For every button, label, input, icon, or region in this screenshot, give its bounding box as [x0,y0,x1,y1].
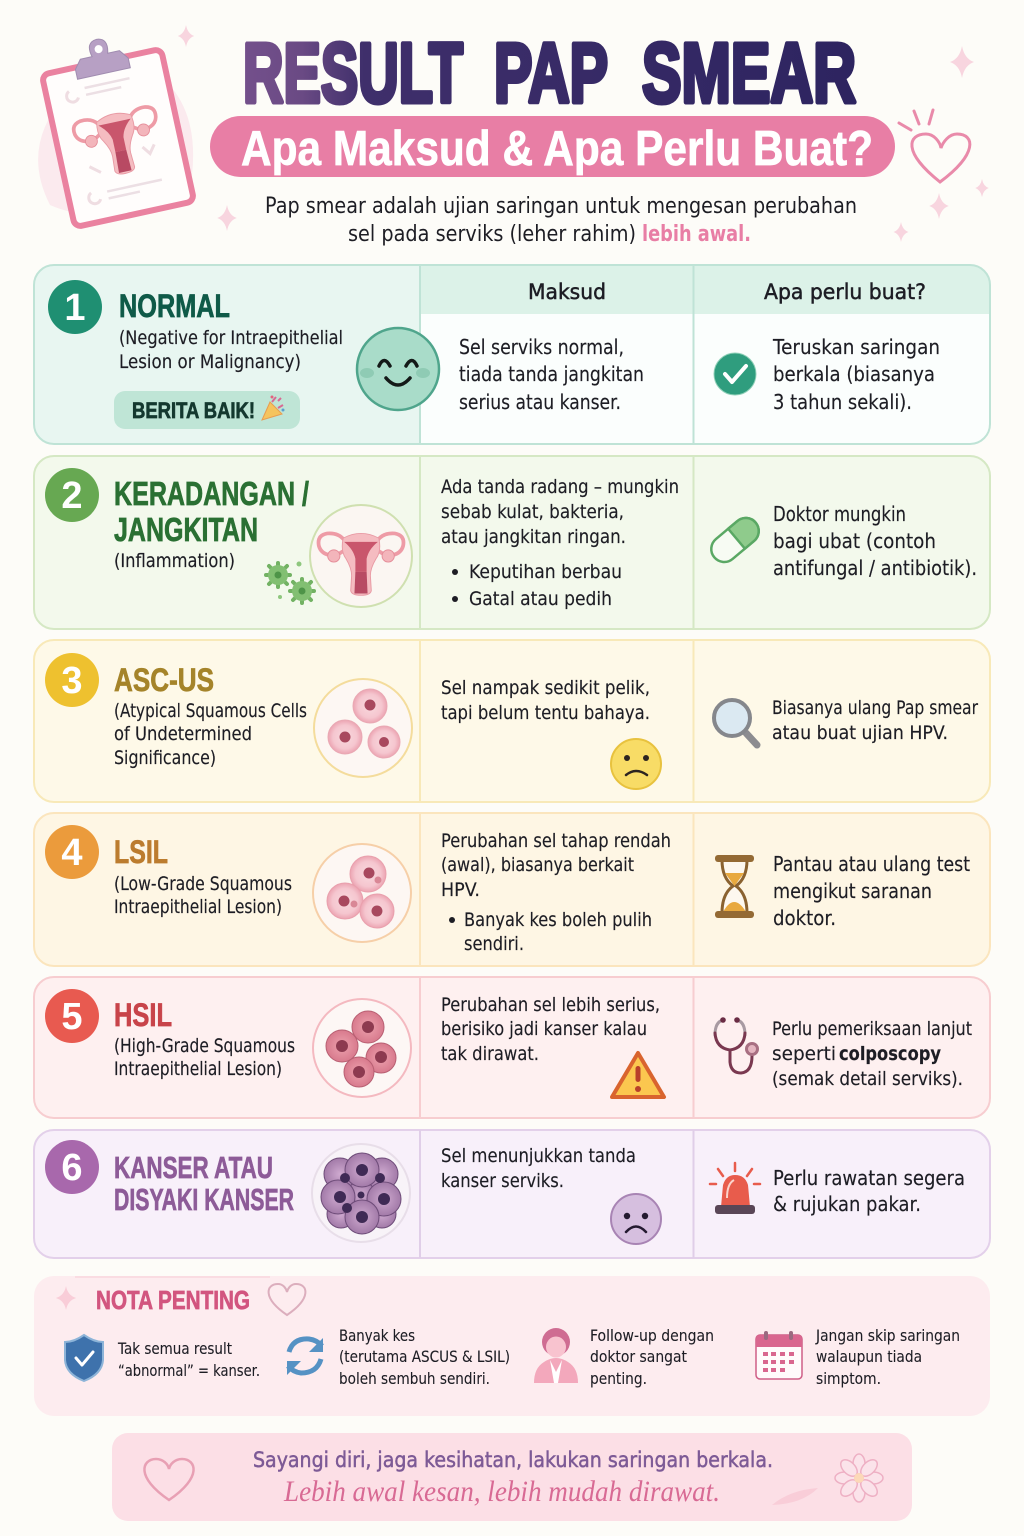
text: action hsil [772,1018,972,1090]
number badge 6 [45,1140,99,1194]
text: action lsil: mengikut saranan [773,879,932,903]
description: hsil [114,1035,295,1080]
note text 1 [117,1339,260,1380]
heading: asc-us: ASC-US [114,662,214,698]
heading: keradangan [114,475,309,548]
panel: 6 kanser [34,1130,990,1258]
heading: keradangan: KERADANGAN / [114,475,309,512]
icon: calendar [756,1331,802,1379]
text: maksud hsil: berisiko jadi kanser kalau [441,1018,647,1040]
column header: apa perlu buat: Apa perlu buat? [764,280,926,304]
text: maksud asc-us: Sel nampak sedikit pelik, [441,677,650,699]
description: asc-us [114,700,307,769]
text: maksud lsil: sendiri. [464,933,524,955]
heading: lsil: LSIL [114,834,168,870]
note text 3: Follow-up dengan [590,1326,714,1345]
icon: flower [835,1454,883,1502]
heading: kanser: KANSER ATAU [114,1150,273,1185]
text: maksud keradangan [441,476,679,610]
icon: leaf [772,1488,818,1505]
description: normal [119,327,343,373]
note text 1: Tak semua result [117,1339,232,1358]
intro text [265,194,857,247]
text: action normal: Teruskan saringan [772,335,940,359]
description: asc-us: Significance) [114,747,216,769]
note text 4: Jangan skip saringan [815,1326,960,1345]
text: action normal: 3 tahun sekali). [773,390,912,414]
number badge 5 [45,989,99,1043]
text: action hsil: Perlu pemeriksaan lanjut [772,1018,972,1040]
footer line 2: Lebih awal kesan, lebih mudah dirawat. [283,1475,720,1508]
icon: refresh arrows [287,1338,323,1375]
icon: capsule [706,513,764,567]
text: maksud lsil [441,830,671,955]
icon: cells asc-us [314,679,412,777]
icon: heart outline [269,1284,305,1315]
text: maksud keradangan: sebab kulat, bakteria, [441,501,624,523]
panel: 3 asc-us [34,640,990,802]
note text 3: penting. [590,1369,647,1388]
note text 3 [590,1326,714,1388]
intro text: sel pada serviks (leher rahim) [348,222,636,247]
panel: 1 normal [34,265,990,444]
text: maksud keradangan: Gatal atau pedih [469,588,612,610]
panel: nota penting [34,1276,990,1416]
description: asc-us: of Undetermined [114,723,252,745]
text: action hsil: (semak detail serviks). [772,1068,963,1090]
heading: kanser [114,1150,294,1217]
note text 2: (terutama ASCUS & LSIL) [339,1347,510,1366]
icon: clipboard with uterus [37,26,194,227]
footer line 1: Sayangi diri, jaga kesihatan, lakukan saringan berkala. [253,1448,773,1472]
text: maksud asc-us: tapi belum tentu bahaya. [441,702,650,724]
title: PAP [494,26,608,120]
text: maksud hsil: Perubahan sel lebih serius, [441,994,660,1016]
intro text: Pap smear adalah ujian saringan untuk mengesan perubahan [265,194,857,219]
badge: berita baik: BERITA BAIK! [132,398,255,423]
icon: worried face [611,739,661,789]
description: normal: Lesion or Malignancy) [119,351,301,373]
note text 4: walaupun tiada [816,1347,922,1366]
icon: footer heart [144,1459,194,1500]
note text 2: boleh sembuh sendiri. [339,1369,490,1388]
text: maksud hsil: tak dirawat. [441,1043,539,1065]
text: maksud normal [459,335,644,414]
number badge 1 [48,280,102,334]
text: action asc-us: atau buat ujian HPV. [772,722,948,744]
text: maksud lsil: Perubahan sel tahap rendah [441,830,671,852]
description: asc-us: (Atypical Squamous Cells [114,700,307,722]
description: hsil: Intraepithelial Lesion) [114,1058,282,1080]
icon: cells hsil [313,999,411,1097]
number badge 2: 2 [61,475,83,517]
text: maksud lsil: HPV. [441,879,480,901]
icon: sparkle [56,1286,76,1310]
intro text: lebih awal. [642,222,751,247]
icon: cell cluster [312,1144,410,1242]
icon: happy face [357,328,439,410]
text: action hsil: colposcopy [839,1043,942,1065]
text: maksud keradangan: atau jangkitan ringan. [441,526,626,548]
number badge 1: 1 [64,287,86,329]
icon: sad face [611,1194,661,1244]
panel: footer message [112,1433,912,1521]
title: SMEAR [642,26,856,120]
number badge 3 [45,653,99,707]
text: maksud hsil [441,994,660,1065]
text: action lsil: Pantau atau ulang test [773,852,970,876]
text: action keradangan: antifungal / antibiotik). [773,556,977,580]
decorative sparkles [178,25,989,242]
text: maksud keradangan: Ada tanda radang – mungkin [441,476,679,498]
description: lsil: (Low-Grade Squamous [114,873,292,895]
heading: nota penting: NOTA PENTING [96,1285,250,1315]
number badge 5: 5 [61,996,83,1038]
column header: maksud: Maksud [528,280,606,304]
note text 2: Banyak kes [339,1326,415,1345]
title: RESULT [243,26,463,120]
text: action normal [772,335,940,414]
note text 4 [815,1326,960,1388]
number badge 2 [45,468,99,522]
panel: 5 hsil [34,977,990,1118]
number badge 4: 4 [61,832,83,874]
description: lsil: Intraepithelial Lesion) [114,896,282,918]
badge: berita baik [114,391,300,429]
text: action asc-us: Biasanya ulang Pap smear [772,697,978,719]
description: lsil [114,873,292,918]
heading: normal: NORMAL [119,288,230,324]
text: maksud lsil: Banyak kes boleh pulih [464,909,652,931]
text: maksud kanser [441,1145,636,1192]
subtitle pill: Apa Maksud & Apa Perlu Buat? [241,122,873,176]
note text 1: “abnormal” = kanser. [118,1361,260,1380]
text: action lsil [773,852,970,930]
text: action keradangan: bagi ubat (contoh [773,529,936,553]
icon: stethoscope [715,1017,758,1073]
description: inflammation: (Inflammation) [114,550,235,572]
description: hsil: (High-Grade Squamous [114,1035,295,1057]
icon: shield [65,1335,103,1381]
icon: doctor [534,1328,578,1383]
icon: uterus circle [310,505,412,607]
icon: germs [266,562,314,603]
text: maksud normal: Sel serviks normal, [459,335,624,359]
icon: hourglass [715,855,754,918]
text: action kanser: & rujukan pakar. [773,1192,921,1216]
text: action kanser: Perlu rawatan segera [773,1166,965,1190]
text: action lsil: doktor. [773,906,836,930]
text: maksud normal: tiada tanda jangkitan [459,362,644,386]
icon: siren [710,1163,760,1214]
number badge 3: 3 [61,660,83,702]
text: action hsil: seperti [772,1043,836,1065]
icon: warning [612,1053,664,1097]
title [243,26,856,120]
text: action kanser [773,1166,965,1216]
text: action keradangan: Doktor mungkin [773,502,906,526]
panel: 4 lsil [34,813,990,966]
text: maksud asc-us [441,677,650,724]
note text 4: simptom. [816,1369,881,1388]
text: maksud kanser: Sel menunjukkan tanda [441,1145,636,1167]
text: maksud kanser: kanser serviks. [441,1170,564,1192]
text: maksud lsil: (awal), biasanya berkait [441,854,634,876]
icon: check [714,353,756,395]
text: action keradangan [773,502,977,580]
number badge 6: 6 [61,1147,83,1189]
description: normal: (Negative for Intraepithelial [119,327,343,349]
panel: 2 keradangan [34,456,990,629]
text: maksud normal: serius atau kanser. [459,390,621,414]
number badge 4 [45,825,99,879]
heading: kanser: DISYAKI KANSER [114,1182,294,1217]
heading: hsil: HSIL [114,997,172,1033]
text: action asc-us [772,697,978,744]
text: maksud keradangan: Keputihan berbau [469,561,622,583]
icon: cells lsil [313,844,411,942]
note text 2 [339,1326,510,1388]
heading: keradangan: JANGKITAN [114,511,258,548]
text: action normal: berkala (biasanya [773,362,935,386]
icon: magnifier [714,700,757,745]
icon: heart with rays [899,110,970,182]
note text 3: doktor sangat [590,1347,687,1366]
